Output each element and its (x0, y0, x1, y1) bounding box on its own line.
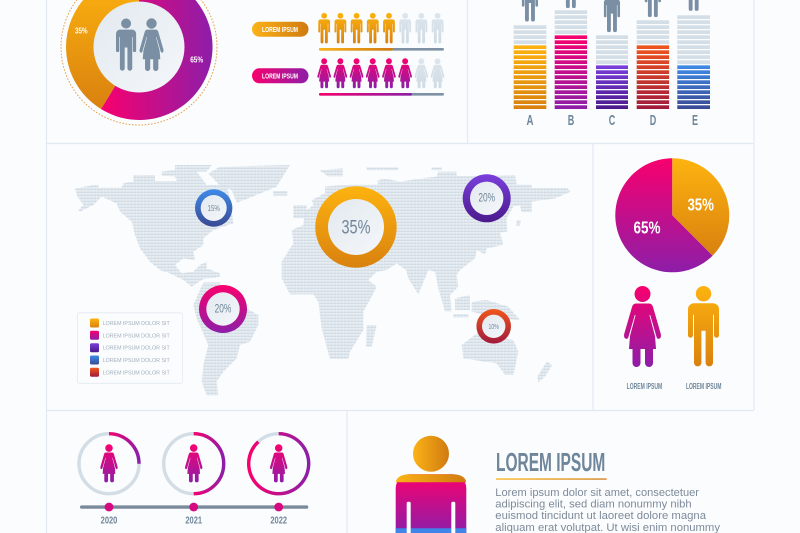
marker: 20% pink: 20% (215, 303, 231, 315)
icon: woman (624, 286, 661, 367)
marker: 10% (476, 309, 511, 344)
label 35%: 35% (75, 26, 88, 36)
donut segment: 35% (66, 0, 139, 109)
marker: 20% purple: 20% (478, 193, 495, 205)
year labels (101, 515, 287, 526)
pie slice 35% (672, 158, 729, 256)
donut segment: 65% (101, 0, 213, 120)
paragraph: euismod tincidunt ut laoreet dolore magna (495, 510, 707, 522)
marker: 10%: 10% (489, 322, 499, 331)
icon: large person (396, 436, 466, 533)
panel: donut chart with couple (61, 0, 217, 125)
panel: pie chart and figures (615, 158, 729, 391)
caption man: LOREM IPSUM (686, 382, 722, 391)
bar C (596, 35, 628, 109)
progress bar: men (319, 48, 444, 51)
pie slice 65% (615, 158, 713, 272)
legend: LOREM IPSUM DOLOR SIT (103, 333, 170, 339)
bar labels: B (568, 112, 574, 129)
marker: 35%: 35% (342, 216, 370, 238)
paragraph: Lorem ipsum dolor sit amet, consectetuer (495, 487, 699, 499)
dotted map: Americas (75, 165, 290, 396)
label 65%: 65% (190, 55, 204, 65)
legend: LOREM IPSUM DOLOR SIT (103, 358, 170, 364)
bar labels (526, 112, 698, 129)
pie label 65%: 65% (634, 218, 661, 238)
bar A (514, 25, 546, 109)
progress bar: women (319, 93, 444, 96)
panel: large figure and text (396, 436, 720, 533)
panel: pictogram rows (252, 13, 444, 96)
marker: 20% purple (463, 174, 511, 222)
marker: 20% pink (199, 285, 247, 333)
legend (78, 313, 182, 383)
bar labels: C (609, 112, 615, 129)
pill: orange: LOREM IPSUM (262, 25, 298, 34)
heading underline (496, 478, 607, 480)
paragraph (495, 487, 720, 533)
pill: orange (252, 22, 308, 37)
pie label 35%: 35% (687, 195, 714, 215)
women row (317, 58, 444, 88)
dotted map: Europe, Africa, Asia, Oceania (282, 168, 571, 382)
heading: LOREM IPSUM (496, 447, 605, 477)
marker: 15%: 15% (208, 204, 220, 213)
pill: pink: LOREM IPSUM (262, 72, 298, 80)
panel: striped bar chart (514, 0, 710, 129)
marker: 15% (195, 189, 232, 227)
pill: pink (252, 68, 308, 83)
dashed outer ring (61, 0, 217, 125)
donut centre (94, 2, 184, 92)
year labels: 2020 (101, 515, 118, 526)
men row (318, 13, 443, 43)
year labels: 2022 (270, 515, 287, 526)
marker: 35% (315, 186, 397, 268)
timeline axis (80, 503, 308, 511)
ring 2021 (164, 434, 224, 494)
legend: LOREM IPSUM DOLOR SIT (103, 321, 170, 327)
bar labels: E (692, 112, 698, 129)
panel: timeline (79, 434, 309, 526)
ring 2022 (249, 434, 309, 494)
panel: world map (75, 165, 571, 396)
year labels: 2021 (185, 515, 202, 526)
legend: LOREM IPSUM DOLOR SIT (103, 370, 170, 376)
caption woman: LOREM IPSUM (627, 382, 662, 391)
legend: LOREM IPSUM DOLOR SIT (103, 346, 170, 352)
ring 2020 (79, 434, 139, 494)
icon: woman (140, 18, 164, 71)
icon: man (116, 18, 136, 71)
icon: man (688, 286, 719, 366)
figures above bars (522, 0, 702, 32)
paragraph: adipiscing elit, sed diam nonummy nibh (495, 498, 692, 510)
bar E (677, 15, 710, 109)
bar labels: A (526, 112, 534, 129)
bar labels: D (650, 112, 656, 129)
bar B (555, 10, 587, 109)
bar D (637, 20, 669, 109)
